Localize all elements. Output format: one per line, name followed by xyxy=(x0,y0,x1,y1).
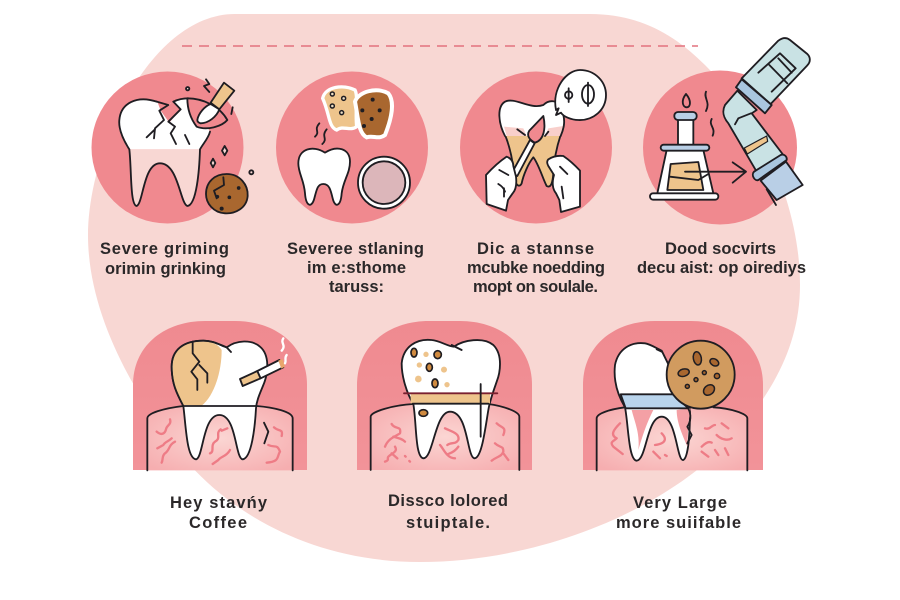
circle background xyxy=(276,72,428,224)
rounded panel background xyxy=(133,321,307,470)
circle background xyxy=(643,70,797,224)
caption: orimin grinking xyxy=(105,260,226,278)
icon: cracked tooth, brown stain and tool xyxy=(119,79,253,213)
panel: stain tool xyxy=(460,70,612,296)
caption xyxy=(467,240,605,296)
caption: mcubke noedding xyxy=(467,259,605,277)
caption xyxy=(388,492,508,532)
caption: Severe griming xyxy=(100,240,229,258)
caption: decu aist: op oirediys xyxy=(637,259,806,277)
caption: more suiifable xyxy=(616,514,741,532)
caption xyxy=(287,240,424,296)
icon: speckled tooth in gum xyxy=(371,340,519,470)
caption: im e:sthome xyxy=(307,259,406,277)
caption: mopt on soulale. xyxy=(473,278,598,296)
icon: tooth, hands and bubble xyxy=(486,70,606,212)
dashed top divider xyxy=(182,45,698,47)
caption: Very Large xyxy=(633,494,727,512)
panel: heavy coffee xyxy=(133,321,307,532)
caption: Dissco lolored xyxy=(388,492,508,510)
caption xyxy=(100,240,229,278)
caption xyxy=(616,494,741,532)
caption xyxy=(170,494,268,532)
caption: stuiptale. xyxy=(406,514,490,532)
background blob xyxy=(88,14,800,562)
caption: Dood socvirts xyxy=(665,240,776,258)
caption xyxy=(637,240,806,277)
panel: severe staining xyxy=(276,72,428,296)
icon: flask, arrow and dental tube xyxy=(650,38,810,205)
panel: discolored xyxy=(357,321,532,532)
caption: taruss: xyxy=(329,278,384,296)
panel: dental tool xyxy=(637,38,810,277)
panel: very large xyxy=(583,321,763,532)
icon: tooth in gum with magnified lens xyxy=(597,341,747,470)
caption: Coffee xyxy=(189,514,247,532)
circle background xyxy=(92,72,244,224)
rounded panel background xyxy=(583,321,763,470)
panel: severe grinding xyxy=(92,72,253,278)
caption: Severee stlaning xyxy=(287,240,424,258)
caption: Dic a stannse xyxy=(477,240,594,258)
caption: Hey stavńy xyxy=(170,494,268,512)
rounded panel background xyxy=(357,321,532,470)
icon: stained tooth in gum with cigarette xyxy=(147,338,293,470)
circle background xyxy=(460,72,612,224)
icon: stained teeth, tooth and ring xyxy=(298,87,410,209)
